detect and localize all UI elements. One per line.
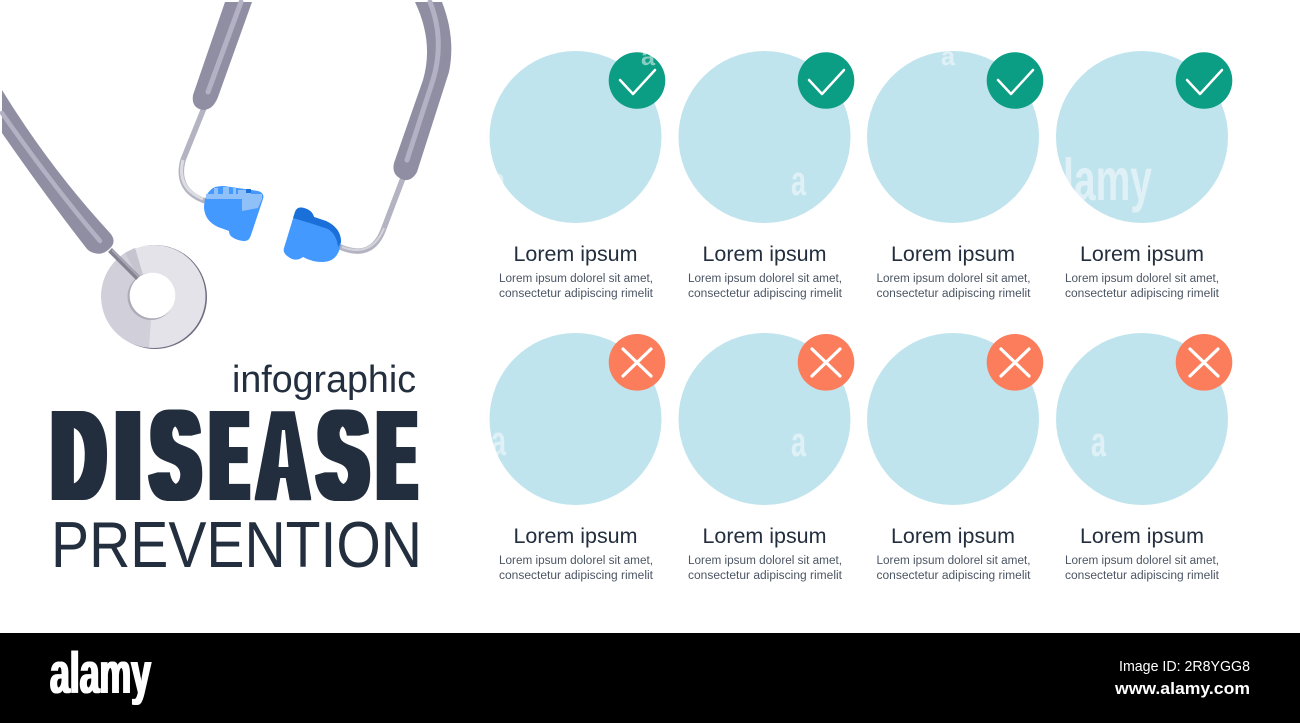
item 3 bbox=[867, 51, 1043, 300]
item 6: Lorem ipsum dolorel sit amet, bbox=[688, 555, 842, 567]
item 8: Lorem ipsum bbox=[1080, 525, 1204, 548]
chest piece disc bbox=[101, 245, 207, 349]
stethoscope illustration bbox=[2, 2, 451, 349]
title line: DISEASE: I bbox=[116, 385, 140, 526]
title bbox=[51, 359, 422, 581]
title line: PREVENTION: PREVENTION bbox=[51, 508, 422, 581]
item 2 bbox=[678, 51, 854, 300]
item 7: Lorem ipsum bbox=[891, 525, 1015, 548]
item 4 bbox=[1056, 51, 1232, 300]
item 1: Lorem ipsum bbox=[514, 243, 638, 266]
item 3: Lorem ipsum dolorel sit amet, bbox=[876, 273, 1030, 285]
title line: DISEASE: A bbox=[259, 385, 307, 526]
title: E bbox=[379, 385, 414, 526]
watermark fragments: a bbox=[791, 157, 806, 204]
item 4: consectetur adipiscing rimelit bbox=[1065, 288, 1220, 300]
website: www.alamy.com bbox=[1114, 679, 1250, 698]
item 8: consectetur adipiscing rimelit bbox=[1065, 570, 1220, 582]
item 1 bbox=[490, 51, 665, 300]
item 8 bbox=[1056, 333, 1232, 582]
item 5: consectetur adipiscing rimelit bbox=[499, 570, 654, 582]
item 5 bbox=[490, 333, 665, 582]
watermark fragments: a bbox=[491, 417, 506, 464]
letter A counter bbox=[278, 430, 288, 467]
watermark fragments: a bbox=[641, 41, 656, 71]
item 1: Lorem ipsum dolorel sit amet, bbox=[499, 273, 653, 285]
item 5: Lorem ipsum dolorel sit amet, bbox=[499, 555, 653, 567]
watermark fragments: a bbox=[1091, 418, 1106, 465]
item 1: consectetur adipiscing rimelit bbox=[499, 288, 654, 300]
title line: DISEASE: S bbox=[152, 385, 199, 526]
item 4: Lorem ipsum bbox=[1080, 243, 1204, 266]
item 2: Lorem ipsum dolorel sit amet, bbox=[688, 273, 842, 285]
left ear tip bbox=[204, 186, 263, 241]
title line: DISEASE: E bbox=[212, 385, 246, 526]
item 6: consectetur adipiscing rimelit bbox=[688, 570, 843, 582]
image id: Image ID: 2R8YGG8 bbox=[1119, 658, 1250, 675]
item 7 bbox=[867, 333, 1043, 582]
item 6: Lorem ipsum bbox=[702, 525, 826, 548]
item 2: consectetur adipiscing rimelit bbox=[688, 288, 843, 300]
item 7: consectetur adipiscing rimelit bbox=[876, 570, 1031, 582]
title line: DISEASE bbox=[53, 385, 414, 526]
title line: DISEASE: D bbox=[53, 385, 104, 526]
right ear tip bbox=[284, 208, 341, 262]
item 4: Lorem ipsum dolorel sit amet, bbox=[1065, 273, 1219, 285]
circles row 1 bbox=[490, 51, 1232, 300]
item 8: Lorem ipsum dolorel sit amet, bbox=[1065, 555, 1219, 567]
item 6 bbox=[678, 333, 854, 582]
watermark fragments bbox=[491, 41, 1152, 465]
watermark fragments: a bbox=[791, 418, 806, 465]
title line: DISEASE: S bbox=[319, 385, 367, 526]
item 5: Lorem ipsum bbox=[514, 525, 638, 548]
watermark fragments: a bbox=[941, 41, 956, 71]
watermark fragments: lamy bbox=[1063, 147, 1152, 213]
item 7: Lorem ipsum dolorel sit amet, bbox=[876, 555, 1030, 567]
item 2: Lorem ipsum bbox=[702, 243, 826, 266]
item 3: consectetur adipiscing rimelit bbox=[876, 288, 1031, 300]
footer logo: alamy bbox=[50, 641, 151, 706]
title line: infographic: infographic bbox=[232, 359, 416, 401]
chest tube bbox=[2, 90, 114, 254]
circles row 2 bbox=[490, 333, 1232, 582]
chest piece stem bbox=[110, 250, 139, 278]
watermark fragments: a bbox=[491, 162, 506, 200]
left ear tube bbox=[181, 2, 252, 201]
footer bar bbox=[0, 633, 1300, 723]
right ear tube bbox=[338, 2, 451, 251]
item 3: Lorem ipsum bbox=[891, 243, 1015, 266]
